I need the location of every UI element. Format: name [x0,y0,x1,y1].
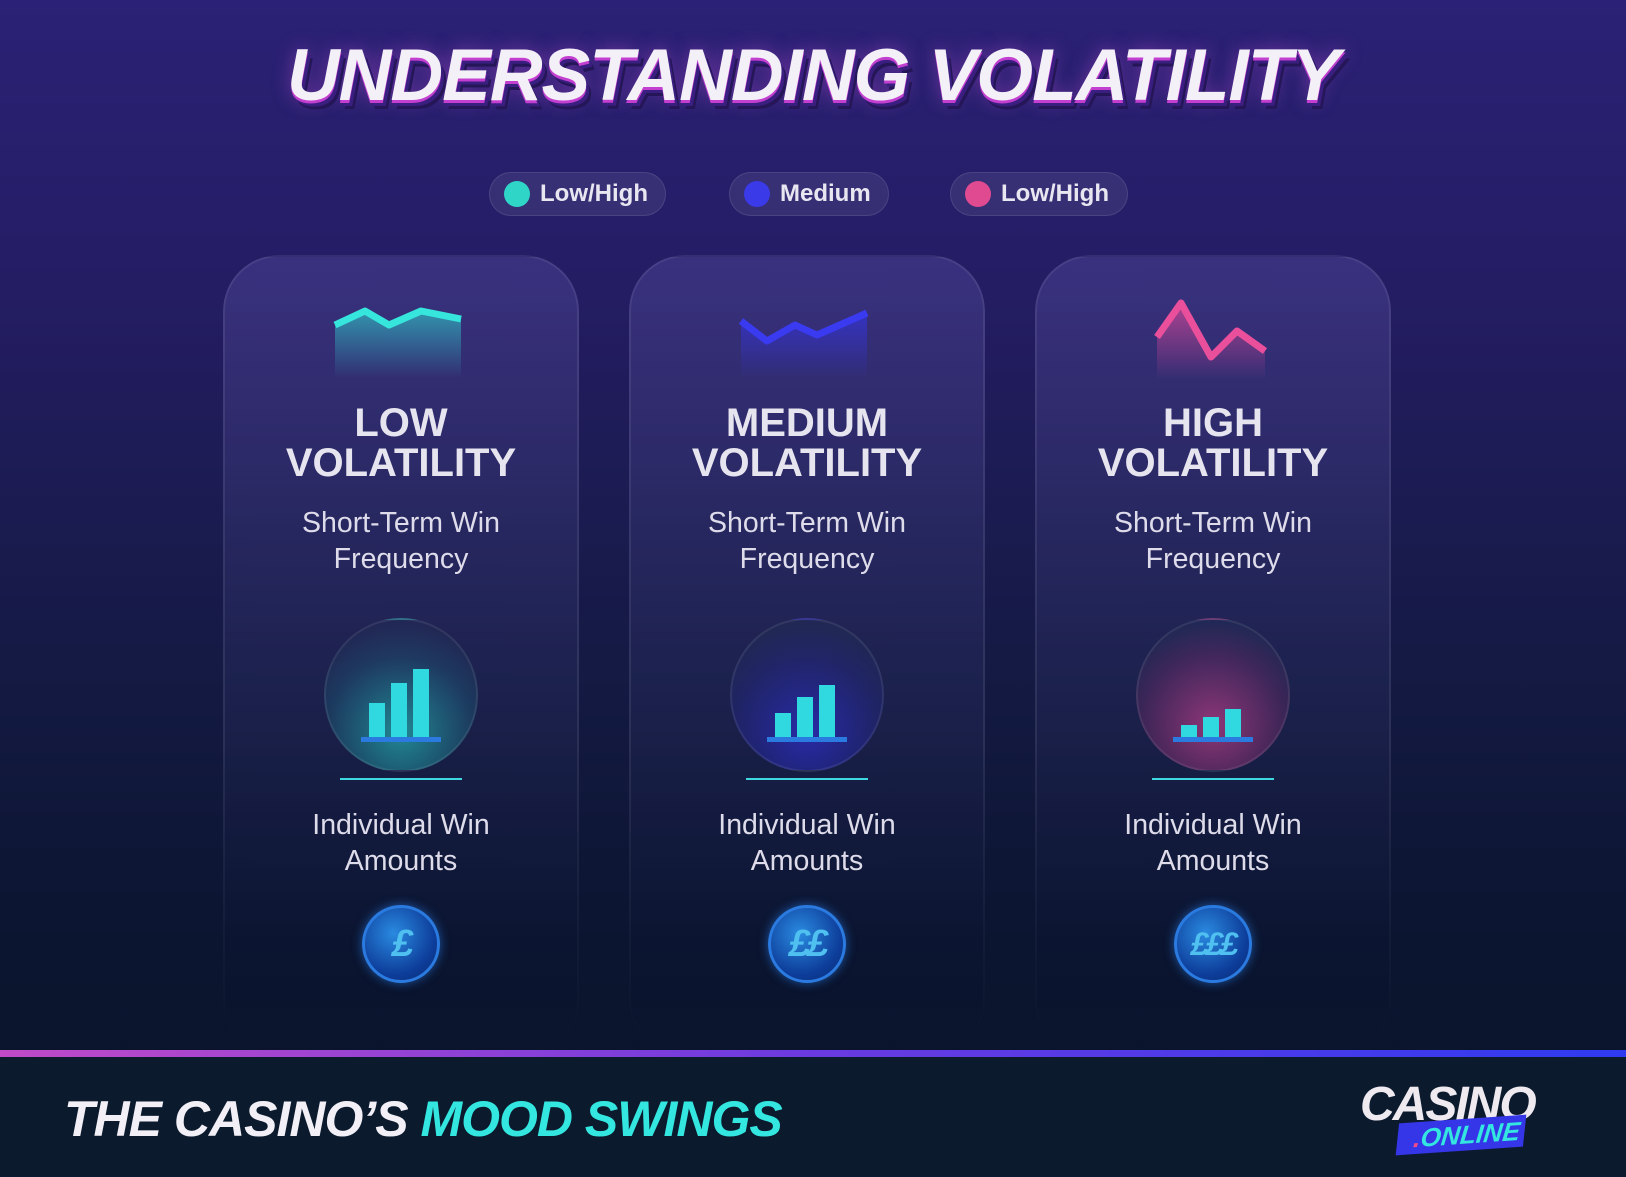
logo: CASINO [1360,1078,1535,1131]
text: short-term [1114,507,1312,575]
text: individual [312,809,490,877]
legend: medium [729,172,889,216]
heading [1098,401,1328,485]
footer tagline: THE CASINO’S MOOD SWINGS [64,1091,782,1147]
divider gradient bar [0,1050,1626,1057]
icon: coin [1174,905,1252,983]
icon: bar orb [324,618,478,772]
title: UNDERSTANDING VOLATILITY [287,35,1339,116]
text: individual: Individual Win [1124,809,1302,841]
text: short-term: Frequency [1146,543,1280,575]
text: individual [1124,809,1302,877]
text: short-term: Short-Term Win [708,507,906,539]
legend: low/high pink [950,172,1128,216]
heading: MEDIUM [726,401,888,445]
text: individual: Individual Win [718,809,896,841]
heading: VOLATILITY [286,441,516,485]
logo: .ONLINE [1412,1116,1522,1153]
text: short-term: Short-Term Win [1114,507,1312,539]
text: individual [718,809,896,877]
legend: low/high pink: Low/High [1001,180,1109,207]
heading: VOLATILITY [1098,441,1328,485]
legend: low/high teal: Low/High [540,180,648,207]
icon: medium line chart [739,310,868,371]
heading: LOW [354,401,448,445]
text: individual: Amounts [751,845,863,877]
text: short-term [302,507,500,575]
icon: high line chart [1154,300,1267,374]
footer [0,1057,1626,1177]
text: short-term [708,507,906,575]
icon: bar orb [730,618,884,772]
text: individual: Amounts [345,845,457,877]
text: short-term: Frequency [334,543,468,575]
icon: coin [768,905,846,983]
text: individual: Individual Win [312,809,490,841]
heading [286,401,516,485]
heading [692,401,922,485]
icon: coin: ££ [789,923,825,965]
text: short-term: Frequency [740,543,874,575]
legend: medium: Medium [780,180,871,207]
panel: medium volatility [692,310,922,990]
legend: low/high teal [489,172,666,216]
text: individual: Amounts [1157,845,1269,877]
icon: coin [362,905,440,983]
icon: bar orb [1136,618,1290,772]
icon: low line chart [334,308,462,372]
icon: coin: £ [392,923,410,965]
heading: VOLATILITY [692,441,922,485]
panel: low volatility [286,308,516,990]
panel: high volatility [1098,300,1328,990]
logo [1360,1078,1536,1156]
icon: coin: £££ [1191,926,1235,962]
heading: HIGH [1163,401,1263,445]
text: short-term: Short-Term Win [302,507,500,539]
